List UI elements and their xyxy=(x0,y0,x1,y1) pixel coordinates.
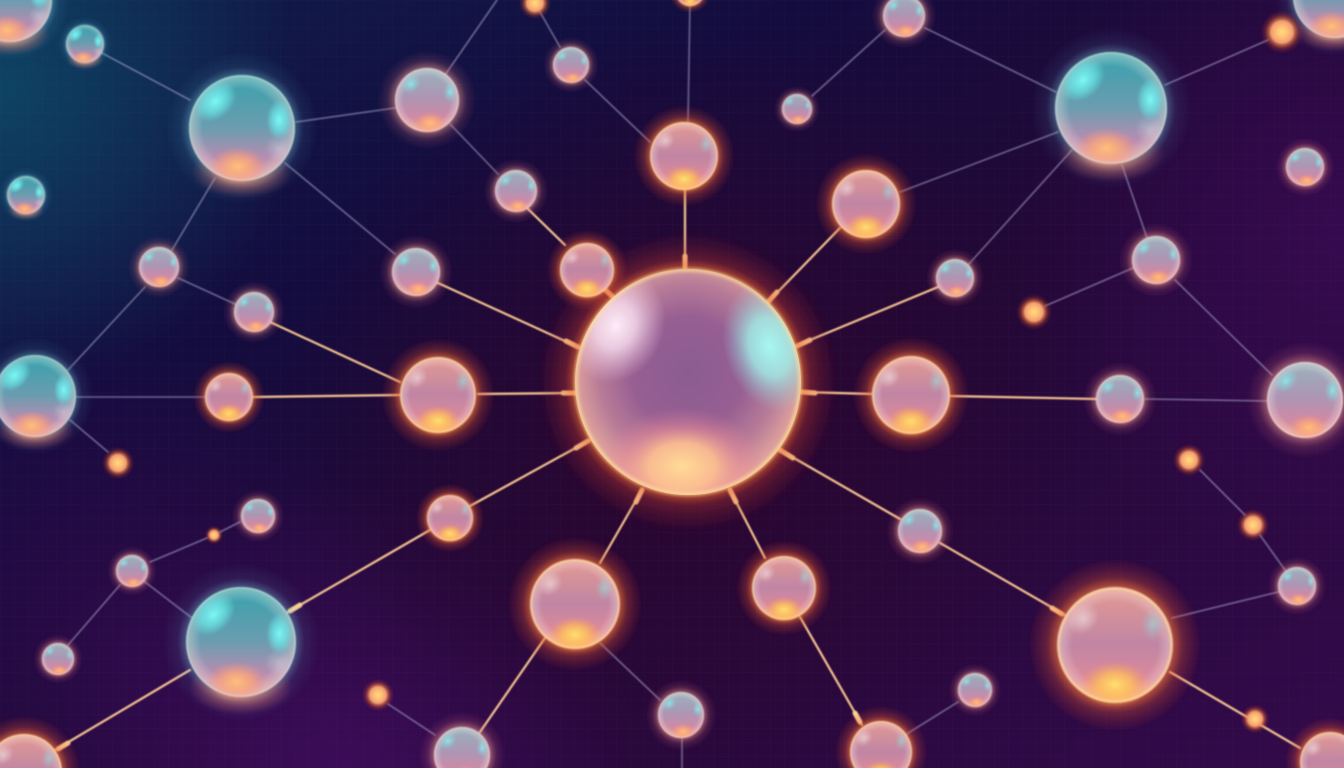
sphere: pale 416,272 xyxy=(381,237,451,307)
sphere: warm bottom right corner xyxy=(1285,717,1344,768)
sphere: warm upper right xyxy=(815,153,917,255)
sphere: warm bottom left corner xyxy=(0,715,81,768)
sphere: small teal left xyxy=(2,171,50,220)
sphere: pale 681,715 xyxy=(648,682,714,748)
sphere: warm below left xyxy=(508,536,642,672)
sphere: pale 1297,586 xyxy=(1270,558,1324,614)
sphere: pale 571,65 xyxy=(543,37,599,93)
sphere: warm above centre xyxy=(633,105,735,207)
central large sphere xyxy=(550,254,832,524)
sphere: lower left large teal xyxy=(170,570,312,714)
sphere: large warm lower right xyxy=(1028,558,1202,732)
sphere: warm bottom xyxy=(834,706,928,768)
sphere: pale 955,278 xyxy=(926,249,984,307)
ember 378,695 xyxy=(362,679,394,711)
sphere: right edge teal xyxy=(1246,341,1344,459)
sphere: warm below right xyxy=(736,540,832,636)
sphere: pale 975,690 xyxy=(950,666,1000,714)
sphere: pale 462,755 xyxy=(422,714,502,768)
sphere: upper right large teal xyxy=(1038,35,1184,182)
warm inner connector lines xyxy=(55,190,1300,750)
sphere: pale 159,267 xyxy=(128,236,190,298)
sphere: top right teal xyxy=(1280,0,1344,52)
sphere: upper left large teal xyxy=(175,60,312,198)
sphere: warm touching centre xyxy=(546,230,628,310)
sphere: pale 258,516 xyxy=(232,490,284,542)
ember 214,535 xyxy=(205,526,223,544)
sphere: top left teal xyxy=(0,0,62,55)
ember 1282,32 xyxy=(1260,10,1304,54)
ember 118,463 xyxy=(102,447,134,479)
sphere: pale 1120,399 xyxy=(1085,364,1156,434)
sphere: pale 920,531 xyxy=(888,499,952,563)
sphere: warm right of centre xyxy=(852,336,970,454)
sphere: pale 797,109 xyxy=(775,87,819,131)
sphere: pale 1305,167 xyxy=(1278,140,1332,194)
ember 1255,719 xyxy=(1241,705,1269,733)
sphere: small warm 58,659 xyxy=(34,636,82,682)
sphere: pale 132,571 xyxy=(108,548,156,594)
sphere: small teal top left xyxy=(61,20,109,70)
sphere: pale 516,191 xyxy=(486,160,546,222)
sphere: pale 1156,260 xyxy=(1121,225,1191,295)
ember 535,3 xyxy=(519,0,551,19)
arrow tips meeting the central sphere xyxy=(58,256,1062,749)
ember 1253,525 xyxy=(1237,509,1269,541)
sphere: warm left of centre xyxy=(381,338,495,452)
sphere: warm far left xyxy=(193,361,265,433)
ember 1189,460 xyxy=(1173,444,1205,476)
sphere: warm lower left xyxy=(416,484,484,552)
sphere: warm top edge xyxy=(669,0,711,13)
sphere: left edge teal xyxy=(0,344,88,450)
central sphere glow xyxy=(538,232,838,532)
ember 1034,312 xyxy=(1016,294,1052,330)
sphere: pale 904,16 xyxy=(871,0,937,49)
sphere: pale 427,100 xyxy=(380,53,474,147)
sphere: pale 254,312 xyxy=(223,281,285,343)
